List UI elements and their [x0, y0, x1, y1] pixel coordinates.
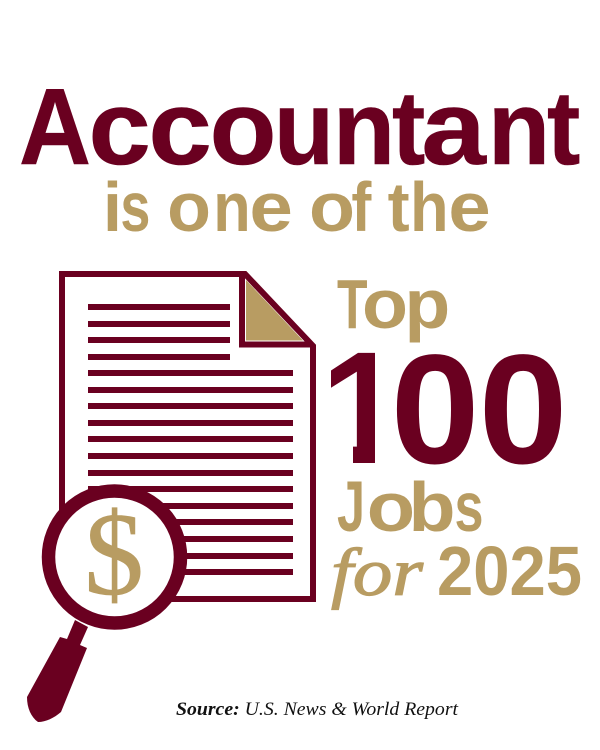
title: Accountant: t: [547, 70, 580, 187]
title: Accountant: A: [19, 66, 91, 188]
Jobs: J: [337, 468, 365, 547]
Top: p: [404, 265, 450, 343]
subtitle: is one of the: f: [351, 168, 372, 246]
Jobs: s: [454, 468, 484, 546]
100: 0: [479, 323, 568, 497]
100: [331, 352, 561, 464]
subtitle: is one of the: i: [103, 168, 122, 246]
title: Accountant: [19, 66, 580, 188]
title: Accountant: a: [421, 70, 488, 187]
Top: o: [362, 265, 408, 343]
title: Accountant: c: [148, 70, 212, 187]
icon: magnifying glass: [27, 488, 180, 722]
magnifier lens: [48, 491, 180, 623]
title: Accountant: n: [333, 70, 395, 187]
subtitle: is one of the: [103, 168, 491, 246]
2025: 2025: [437, 532, 582, 610]
title: Accountant: c: [88, 70, 151, 187]
100: 1: [320, 318, 408, 497]
subtitle: is one of the: h: [410, 168, 449, 246]
subtitle: is one of the: e: [249, 168, 293, 246]
title: Accountant: u: [274, 70, 334, 187]
Jobs: [337, 468, 484, 547]
subtitle: is one of the: o: [167, 168, 211, 246]
icon: document: [62, 274, 313, 599]
subtitle: is one of the: e: [448, 168, 491, 246]
Top: T: [337, 265, 368, 343]
100: 0: [391, 323, 480, 497]
title: Accountant: t: [392, 70, 425, 187]
title: Accountant: n: [488, 70, 550, 187]
document fold: [242, 274, 313, 344]
magnifier handle: [27, 620, 88, 722]
headline: Top 100 Jobs for 2025: [320, 265, 582, 610]
subtitle: is one of the: o: [309, 168, 355, 246]
document outline: [62, 274, 313, 599]
subtitle: is one of the: n: [213, 168, 251, 246]
Jobs: o: [367, 468, 415, 546]
dollar sign: $: [84, 488, 144, 620]
for: for: [331, 534, 424, 610]
subtitle: is one of the: s: [120, 168, 150, 246]
Top: [337, 265, 450, 343]
source line: Source: U.S. News & World Report: [176, 699, 459, 720]
title: Accountant: o: [210, 70, 276, 187]
Jobs: b: [408, 468, 456, 546]
document text lines: [88, 304, 293, 575]
subtitle: is one of the: t: [388, 168, 410, 246]
